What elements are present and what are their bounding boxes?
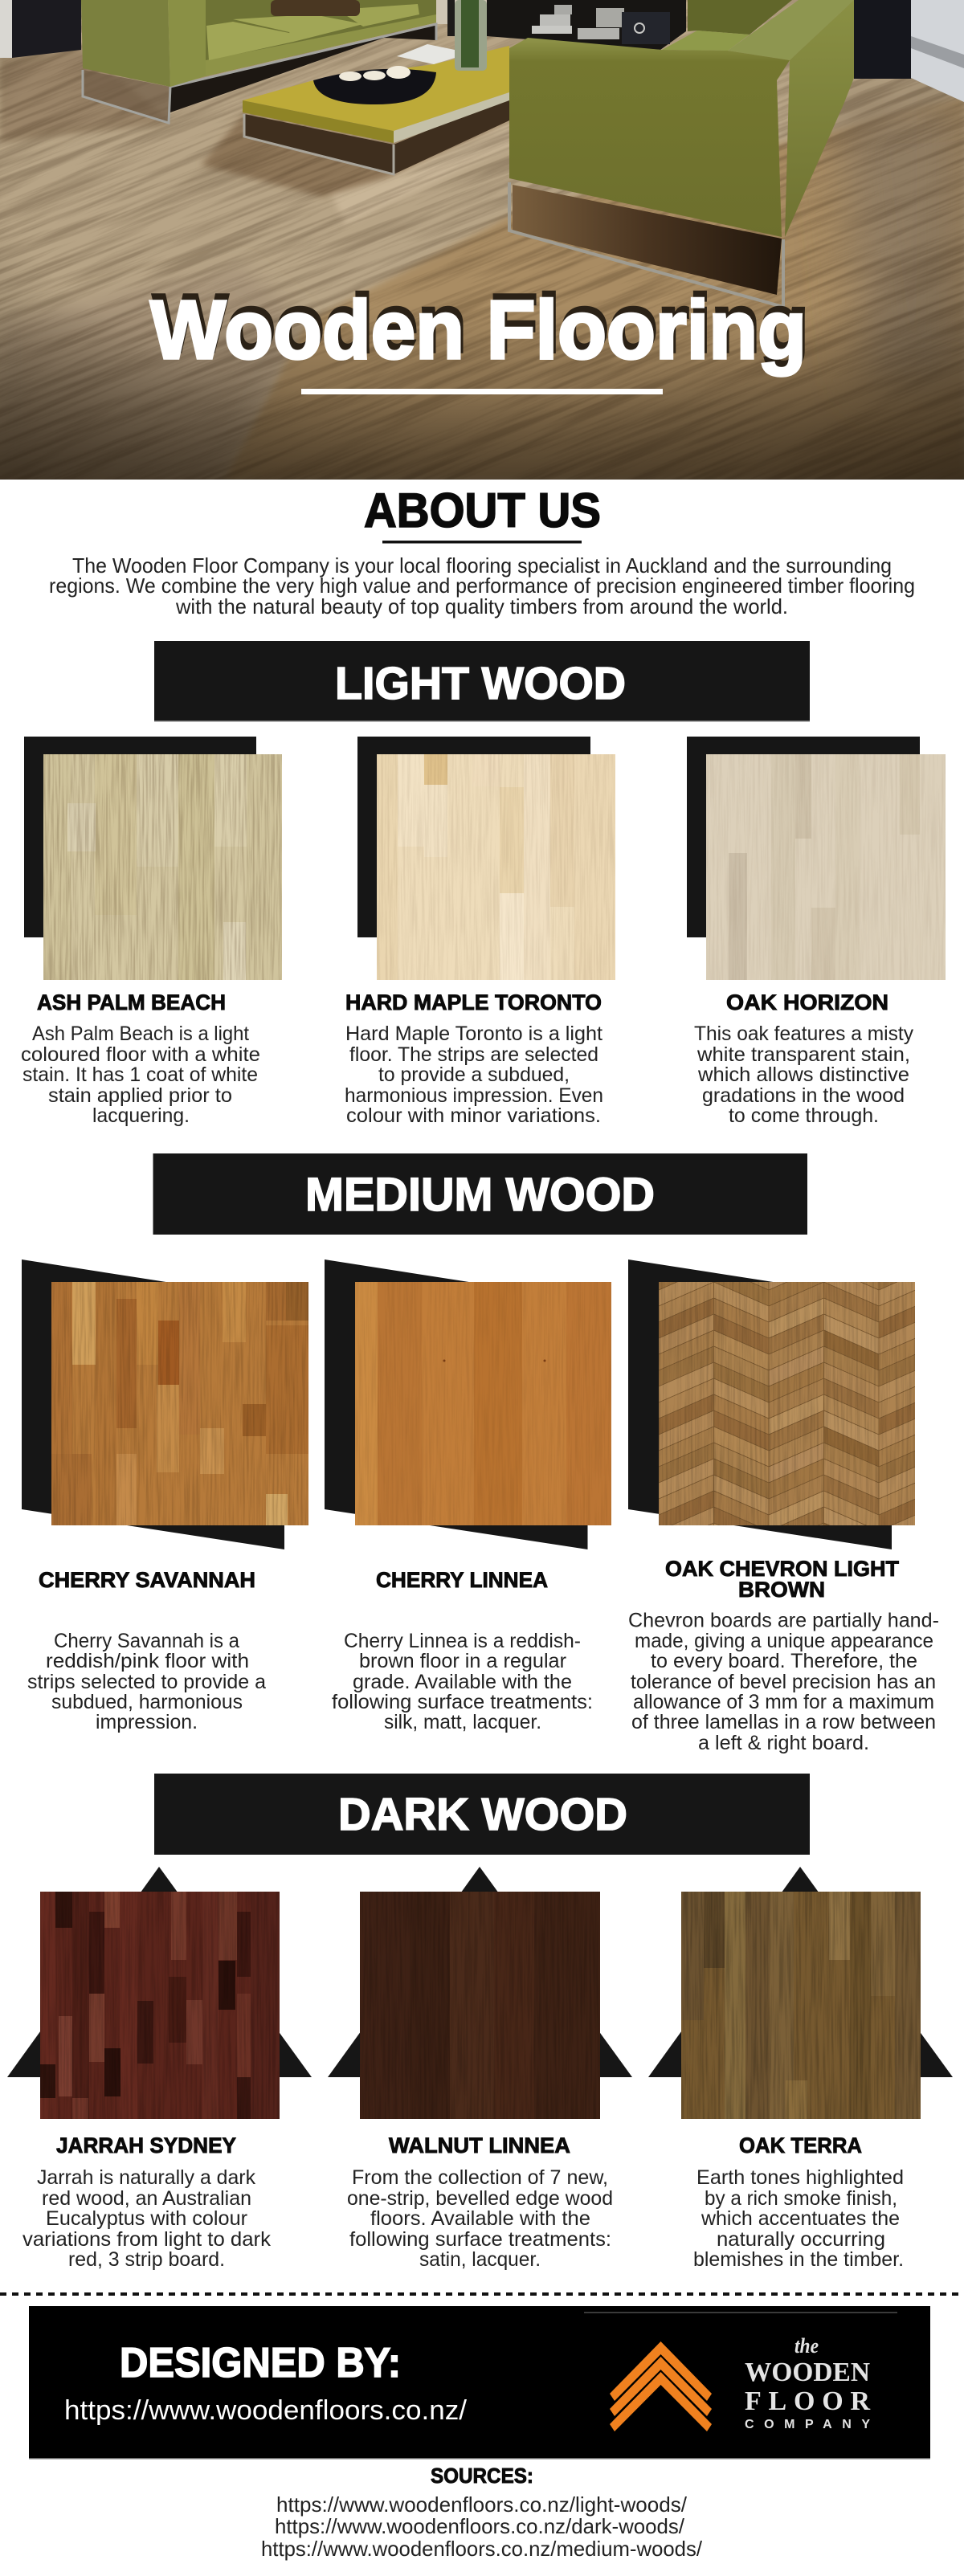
description: one-strip, bevelled edge wood bbox=[347, 2187, 613, 2210]
logo: company wordmark: the bbox=[794, 2334, 819, 2358]
hero photo: living room with oak floor bbox=[0, 0, 964, 480]
description: blemishes in the timber. bbox=[693, 2248, 904, 2271]
description: which accentuates the bbox=[701, 2207, 900, 2230]
description: white transparent stain, bbox=[696, 1043, 910, 1066]
description: which allows distinctive bbox=[697, 1063, 909, 1086]
panel: designed by footer bbox=[29, 2306, 930, 2460]
skewed black backing bbox=[22, 1259, 284, 1549]
description: reddish/pink floor with bbox=[46, 1650, 249, 1672]
description: Chevron boards are partially hand- bbox=[628, 1610, 939, 1632]
name: BROWN bbox=[738, 1578, 825, 1602]
sources list: https://www.woodenfloors.co.nz/medium-woods/ bbox=[261, 2537, 703, 2561]
swatch: oak horizon bbox=[706, 754, 946, 980]
description: impression. bbox=[96, 1711, 198, 1733]
banner: light wood: LIGHT WOOD bbox=[335, 658, 626, 709]
designed by heading: DESIGNED BY: bbox=[120, 2340, 401, 2386]
description: of three lamellas in a row between bbox=[631, 1711, 936, 1733]
description: a left & right board. bbox=[698, 1732, 869, 1754]
black triangle backing bbox=[648, 1867, 953, 2077]
description: subdued, harmonious bbox=[51, 1691, 243, 1713]
description: red, 3 strip board. bbox=[68, 2248, 225, 2271]
description: floor. The strips are selected bbox=[349, 1043, 598, 1066]
panel: cherry savannah bbox=[22, 1259, 308, 1733]
description: floors. Available with the bbox=[370, 2207, 590, 2230]
panel: ash palm beach bbox=[21, 737, 282, 1127]
description: colour with minor variations. bbox=[346, 1104, 601, 1127]
description: From the collection of 7 new, bbox=[352, 2166, 608, 2189]
swatch: walnut linnea bbox=[360, 1892, 600, 2119]
swatch: jarrah sydney bbox=[40, 1892, 280, 2119]
description: by a rich smoke finish, bbox=[705, 2187, 897, 2210]
sources list: https://www.woodenfloors.co.nz/light-woods/ bbox=[276, 2492, 688, 2517]
banner: dark wood: DARK WOOD bbox=[338, 1789, 627, 1840]
hero title: Wooden Flooring bbox=[150, 284, 807, 376]
panel: oak terra bbox=[648, 1867, 953, 2271]
description: following surface treatments: bbox=[332, 1691, 593, 1713]
panel: oak horizon bbox=[687, 737, 946, 1127]
description bbox=[693, 2166, 904, 2271]
description: Cherry Savannah is a bbox=[54, 1630, 239, 1652]
name: OAK CHEVRON LIGHT bbox=[665, 1557, 899, 1581]
description: strips selected to provide a bbox=[27, 1671, 266, 1693]
logo: company wordmark: COMPANY bbox=[745, 2418, 870, 2431]
description bbox=[332, 1630, 593, 1733]
about us paragraph: regions. We combine the very high value and performance of precision engineered timber flooring bbox=[49, 574, 915, 598]
description: Hard Maple Toronto is a light bbox=[345, 1023, 602, 1045]
description: to come through. bbox=[729, 1104, 879, 1127]
description bbox=[347, 2166, 613, 2271]
sources list bbox=[261, 2492, 703, 2561]
logo: company wordmark bbox=[745, 2334, 870, 2431]
description: This oak features a misty bbox=[694, 1023, 913, 1045]
description: naturally occurring bbox=[717, 2228, 885, 2251]
hero right sofa bbox=[509, 0, 854, 307]
hero title underline bbox=[301, 389, 663, 394]
banner: light wood bbox=[154, 641, 810, 721]
description: silk, matt, lacquer. bbox=[384, 1711, 541, 1733]
hero wall and dark furniture bbox=[0, 0, 964, 102]
logo: company wordmark: WOODEN bbox=[745, 2358, 870, 2387]
description: Eucalyptus with colour bbox=[46, 2207, 247, 2230]
description: made, giving a unique appearance bbox=[635, 1630, 933, 1652]
description: to provide a subdued, bbox=[378, 1063, 570, 1086]
about us paragraph: The Wooden Floor Company is your local flooring specialist in Auckland and the surrounding bbox=[72, 553, 892, 578]
designer url: https://www.woodenfloors.co.nz/ bbox=[64, 2395, 468, 2426]
swatch: cherry linnea bbox=[355, 1282, 611, 1525]
description: coloured floor with a white bbox=[21, 1043, 260, 1066]
description: to every board. Therefore, the bbox=[651, 1650, 917, 1672]
description: brown floor in a regular bbox=[359, 1650, 566, 1672]
description bbox=[694, 1023, 913, 1127]
logo: company wordmark: FLOOR bbox=[745, 2386, 870, 2416]
black triangle backing bbox=[7, 1867, 312, 2077]
description: Earth tones highlighted bbox=[696, 2166, 904, 2189]
description: lacquering. bbox=[92, 1104, 190, 1127]
description bbox=[22, 2166, 272, 2271]
description: gradations in the wood bbox=[702, 1084, 905, 1107]
name: CHERRY SAVANNAH bbox=[39, 1568, 255, 1592]
heading: about us: ABOUT US bbox=[364, 484, 601, 537]
hero coffee table bbox=[243, 46, 509, 174]
swatch: hard maple toronto bbox=[377, 754, 615, 980]
about us underline bbox=[382, 541, 582, 543]
description: satin, lacquer. bbox=[419, 2248, 541, 2271]
offset black backing bbox=[687, 737, 920, 937]
name: OAK HORIZON bbox=[726, 990, 888, 1014]
description: allowance of 3 mm for a maximum bbox=[633, 1691, 934, 1713]
description bbox=[628, 1610, 939, 1754]
description: Jarrah is naturally a dark bbox=[37, 2166, 255, 2189]
name: CHERRY LINNEA bbox=[376, 1568, 548, 1592]
black triangle backing bbox=[328, 1867, 632, 2077]
banner: dark wood bbox=[154, 1774, 810, 1855]
panel: jarrah sydney bbox=[7, 1867, 312, 2271]
offset black backing bbox=[357, 737, 590, 937]
description: stain. It has 1 coat of white bbox=[22, 1063, 258, 1086]
logo: orange chevron bbox=[610, 2341, 712, 2431]
swatch: ash palm beach bbox=[43, 754, 282, 980]
hero bowl, eggs, book and vase bbox=[313, 0, 487, 104]
name: ASH PALM BEACH bbox=[37, 990, 226, 1014]
hero title: Wooden Flooring bbox=[153, 277, 809, 369]
swatch: cherry savannah bbox=[51, 1282, 308, 1525]
hero media unit bbox=[487, 0, 686, 50]
name: JARRAH SYDNEY bbox=[56, 2133, 236, 2158]
description: stain applied prior to bbox=[48, 1084, 232, 1107]
name: HARD MAPLE TORONTO bbox=[345, 990, 602, 1014]
description bbox=[27, 1630, 266, 1733]
about us paragraph bbox=[49, 553, 915, 618]
section: about us bbox=[49, 484, 915, 618]
sources heading: SOURCES: bbox=[431, 2464, 533, 2488]
swatch: oak terra bbox=[681, 1892, 921, 2119]
hero left sofa bbox=[81, 0, 436, 123]
description bbox=[345, 1023, 603, 1127]
description: following surface treatments: bbox=[349, 2228, 611, 2251]
skewed black backing bbox=[628, 1259, 892, 1549]
offset black backing bbox=[24, 737, 256, 937]
about us paragraph: with the natural beauty of top quality timbers from around the world. bbox=[175, 594, 788, 618]
banner: medium wood bbox=[153, 1153, 807, 1235]
panel: oak chevron light brown bbox=[628, 1259, 939, 1754]
panel: walnut linnea bbox=[328, 1867, 632, 2271]
sources list: https://www.woodenfloors.co.nz/dark-woods/ bbox=[275, 2514, 685, 2538]
skewed black backing bbox=[325, 1259, 588, 1549]
panel: hard maple toronto bbox=[345, 737, 615, 1127]
swatch: oak chevron bbox=[659, 1282, 915, 1525]
panel: cherry linnea bbox=[325, 1259, 611, 1733]
banner: medium wood: MEDIUM WOOD bbox=[305, 1169, 655, 1221]
description: harmonious impression. Even bbox=[345, 1084, 603, 1107]
description: grade. Available with the bbox=[353, 1671, 572, 1693]
name bbox=[665, 1557, 899, 1602]
description bbox=[21, 1023, 260, 1127]
name: OAK TERRA bbox=[739, 2133, 862, 2158]
name: WALNUT LINNEA bbox=[389, 2133, 570, 2158]
description: red wood, an Australian bbox=[42, 2187, 251, 2210]
description: variations from light to dark bbox=[22, 2228, 272, 2251]
description: Ash Palm Beach is a light bbox=[32, 1023, 249, 1045]
description: tolerance of bevel precision has an bbox=[631, 1671, 936, 1693]
description: Cherry Linnea is a reddish- bbox=[344, 1630, 581, 1652]
